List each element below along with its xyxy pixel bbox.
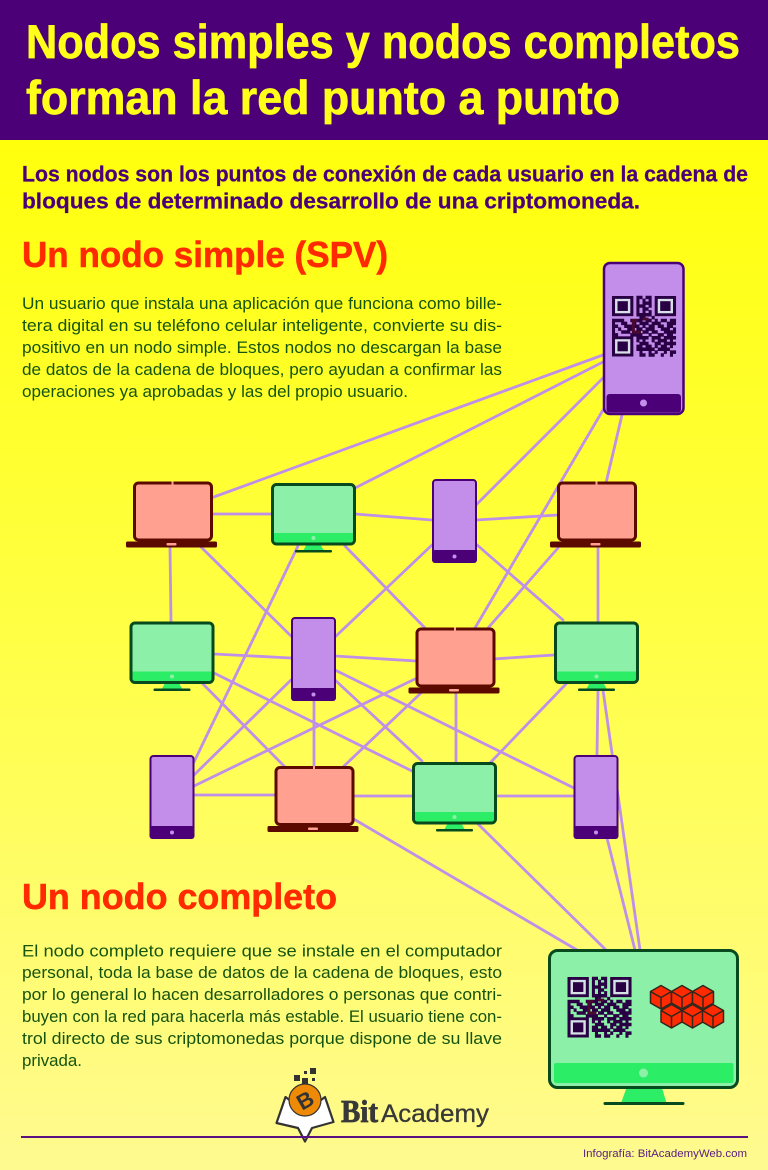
icon: monitor row 2 right (556, 623, 638, 691)
logo: BitAcademy (276, 1068, 490, 1142)
icon: monitor row 2 left (131, 623, 213, 691)
intro text: bloques de determinado desarrollo de una criptomoneda. (22, 188, 640, 214)
text block: simple node: operaciones ya aprobadas y las del propio usuario. (22, 382, 408, 401)
text block: full node: buyen con la red para hacerla más estable. El usuario tiene con- (22, 1007, 502, 1026)
icon: book with coin (276, 1068, 334, 1142)
credit: Infografía: BitAcademyWeb.com (583, 1148, 747, 1160)
text block: simple node: positivo en un nodo simple. Estos nodos no descargan la base (22, 338, 502, 357)
icon: phone row 2 (291, 618, 336, 701)
icon: phone row 3 right (574, 756, 618, 839)
title: forman la red punto a punto (26, 71, 620, 124)
text block: full node: por lo general lo hacen desarrolladores o personas que contri- (22, 985, 502, 1004)
text block: full node (22, 942, 502, 1070)
text block: full node: trol directo de sus criptomonedas porque dispone de su llave (22, 1029, 502, 1048)
heading: full node: Un nodo completo (22, 876, 337, 917)
icon: monitor row 1 (272, 484, 354, 552)
text block: simple node (22, 294, 502, 401)
intro text (22, 162, 748, 214)
text block: simple node: de datos de la cadena de bloques, pero ayudan a confirmar las (22, 360, 502, 379)
heading: simple node: Un nodo simple (SPV) (22, 234, 388, 275)
icon: phone row 1 (432, 480, 477, 563)
text block: simple node: tera digital en su teléfono celular inteligente, convierte su dis- (22, 316, 502, 335)
wordmark: Bit (341, 1093, 378, 1129)
network connection lines (170, 355, 640, 950)
icon: large monitor with QR code and blocks (550, 950, 738, 1105)
icon: laptop row 2 (408, 628, 500, 694)
header banner (0, 0, 768, 140)
footer rule (21, 1136, 748, 1138)
icon: monitor row 3 (414, 764, 496, 832)
icon: large phone with QR code (604, 263, 684, 414)
text block: full node: privada. (22, 1051, 82, 1070)
intro text: Los nodos son los puntos de conexión de cada usuario en la cadena de (22, 162, 748, 186)
logo: BitAcademy: Academy (381, 1100, 490, 1128)
text block: full node: personal, toda la base de datos de la cadena de bloques, esto (22, 963, 502, 982)
text block: simple node: Un usuario que instala una aplicación que funciona como bille- (22, 294, 502, 313)
icon: phone row 3 left (150, 756, 194, 839)
icon: block cubes (650, 986, 724, 1028)
icon: laptop row 3 (268, 766, 358, 832)
text block: full node: El nodo completo requiere que se instale en el computador (22, 942, 502, 960)
icon: book with coin: B (292, 1086, 318, 1115)
icon: laptop row 1 right (550, 482, 641, 548)
title (26, 15, 740, 124)
icon: laptop row 1 left (126, 482, 217, 548)
